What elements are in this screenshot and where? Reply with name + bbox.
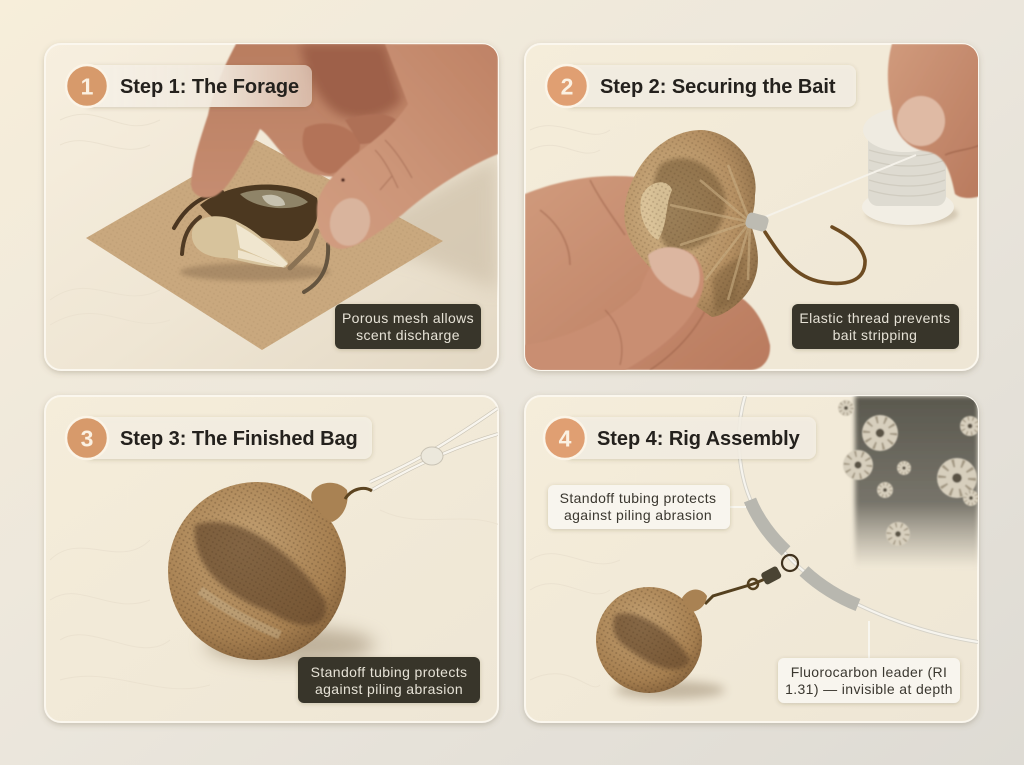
heading: step 3: 3	[81, 426, 93, 452]
callout: bait stripping: Elastic thread prevents	[799, 310, 951, 326]
heading: step 1	[66, 65, 312, 107]
callout: piling abrasion dark: Standoff tubing protects	[311, 664, 467, 680]
icon: piling with barnacles	[838, 396, 980, 568]
swivel	[705, 555, 798, 604]
callout: fluorocarbon leader: Fluorocarbon leader (RI	[791, 664, 947, 680]
thread wrap	[745, 212, 768, 232]
icon: left hand	[525, 176, 770, 370]
icon: small mesh bag	[596, 587, 725, 699]
heading: step 4: Step 4: Rig Assembly	[597, 428, 801, 450]
callout: piling abrasion dark	[298, 657, 480, 703]
callout: standoff tubing	[548, 485, 730, 529]
leader line and tubing	[739, 396, 978, 642]
thread line	[760, 155, 916, 219]
callout: fluorocarbon leader	[778, 658, 960, 703]
heading: step 2: 2	[561, 74, 573, 100]
icon: finished mesh bag	[168, 482, 375, 663]
callout: fluorocarbon leader: 1.31) — invisible at depth	[785, 681, 953, 697]
callout: scent discharge: scent discharge	[356, 327, 460, 343]
icon: thread spool	[862, 108, 958, 226]
heading: step 3	[66, 417, 372, 459]
panel: step 2 securing the bait	[525, 44, 980, 370]
heading: step 4	[544, 417, 816, 459]
callout: piling abrasion dark: against piling abrasion	[315, 681, 463, 697]
panel: step 4 rig assembly	[525, 396, 980, 722]
icon: hand	[191, 44, 498, 250]
heading: step 4: 4	[559, 426, 572, 452]
heading: step 3: Step 3: The Finished Bag	[120, 428, 358, 450]
icon: crab	[174, 184, 330, 292]
icon: right hand	[888, 44, 980, 198]
callout: standoff tubing: Standoff tubing protects	[560, 490, 716, 506]
icon: left thumb	[525, 247, 704, 370]
icon: bait bag	[624, 130, 758, 317]
cord and loop	[370, 408, 498, 490]
burlap mesh square	[86, 140, 443, 350]
callout: scent discharge: Porous mesh allows	[342, 310, 474, 326]
callout: standoff tubing: against piling abrasion	[564, 507, 712, 523]
callout: bait stripping	[792, 304, 959, 349]
icon: hook	[765, 227, 865, 283]
pointer lines	[728, 507, 869, 660]
heading: step 2	[546, 65, 856, 107]
panel: step 1 the forage	[45, 44, 498, 370]
heading: step 1: 1	[81, 74, 94, 100]
panel: step 3 the finished bag	[45, 396, 500, 722]
heading: step 2: Step 2: Securing the Bait	[600, 76, 836, 98]
callout: bait stripping: bait stripping	[833, 327, 917, 343]
heading: step 1: Step 1: The Forage	[120, 76, 299, 98]
callout: scent discharge	[335, 304, 481, 349]
